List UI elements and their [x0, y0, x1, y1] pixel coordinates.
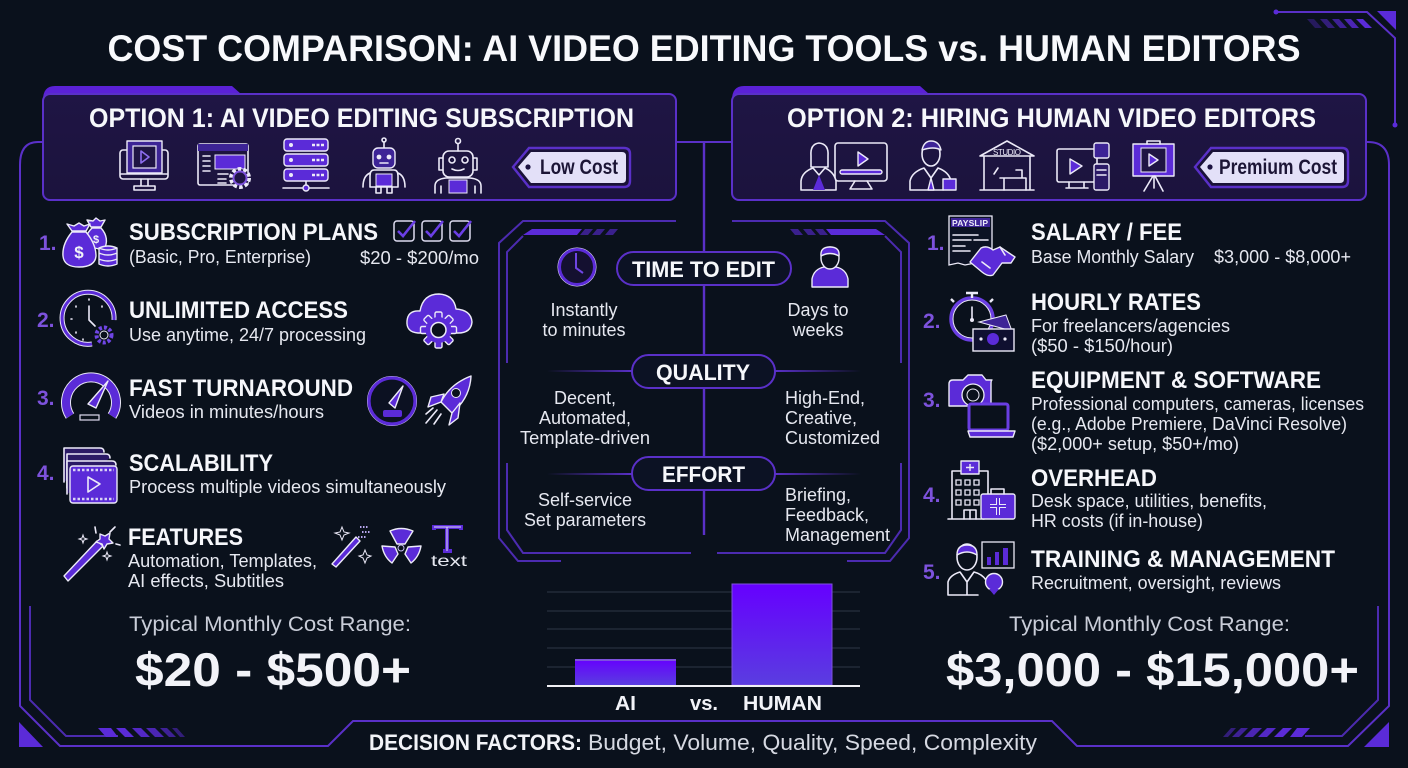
item 2: hourly rates: HOURLY RATES	[1031, 289, 1201, 316]
item 4: scalability: SCALABILITY	[129, 450, 273, 477]
item 1: subscription plans: $20 - $200/mo	[360, 248, 479, 268]
item 4: scalability	[37, 448, 446, 503]
item 5: features: AI effects, Subtitles	[128, 571, 284, 591]
outer frame lines	[19, 142, 1389, 747]
icon: money bags: $	[93, 234, 99, 246]
comparison text: Days to	[787, 300, 849, 320]
bar: human	[732, 584, 832, 685]
pill: quality	[632, 355, 775, 388]
icon: clock with gear	[62, 292, 114, 344]
item 4: overhead: OVERHEAD	[1031, 465, 1157, 492]
icon: payslip and handshake: PAYSLIP	[952, 218, 988, 228]
icon: wand small	[332, 527, 371, 567]
pill: effort: EFFORT	[662, 462, 745, 487]
item 3: equipment: EQUIPMENT & SOFTWARE	[1031, 367, 1321, 394]
comparison text: Set parameters	[524, 510, 646, 530]
comparison text: Template-driven	[520, 428, 650, 448]
item 3: fast turnaround: 3.	[37, 387, 55, 410]
left cost range: $20 - $500+	[135, 643, 411, 696]
item 3: equipment: (e.g., Adobe Premiere, DaVinci Resolve)	[1031, 414, 1347, 434]
item 5: training: Recruitment, oversight, reviews	[1031, 573, 1281, 593]
item 4: overhead: HR costs (if in-house)	[1031, 511, 1203, 531]
icon: server stack	[283, 139, 329, 191]
pill: time to edit: TIME TO EDIT	[632, 257, 775, 282]
panel: human costs list	[923, 216, 1364, 595]
icon: text T	[431, 527, 468, 570]
icon: text T: text	[431, 553, 468, 570]
option 2 heading: OPTION 2: HIRING HUMAN VIDEO EDITORS	[787, 103, 1316, 133]
decision factors	[369, 730, 1037, 755]
item 3: equipment: ($2,000+ setup, $50+/mo)	[1031, 434, 1239, 454]
bar chart	[547, 584, 860, 715]
icon: studio: STUDIO	[993, 148, 1021, 157]
bar: AI	[575, 659, 676, 685]
item 3: equipment: Professional computers, cameras, licenses	[1031, 394, 1364, 414]
title: COST COMPARISON: AI VIDEO EDITING TOOLS vs. HUMAN EDITORS	[108, 28, 1300, 69]
row divider lines	[547, 370, 861, 475]
comparison text: to minutes	[542, 320, 626, 340]
frame brackets	[499, 221, 909, 561]
icon: stopwatch and cash	[951, 293, 1014, 351]
chart labels: AI	[615, 693, 636, 715]
chart labels: vs.	[690, 693, 718, 715]
item 5: training: TRAINING & MANAGEMENT	[1031, 546, 1335, 573]
item 2: unlimited access: 2.	[37, 309, 55, 332]
item 4: overhead	[923, 461, 1267, 531]
item 4: scalability: 4.	[37, 462, 55, 485]
item 1: salary: 1.	[927, 232, 945, 255]
item 5: training: 5.	[923, 561, 941, 584]
item 5: features: Automation, Templates,	[128, 551, 317, 571]
panel: AI costs list	[37, 218, 479, 591]
icon: person	[812, 247, 848, 287]
item 3: fast turnaround	[37, 375, 471, 426]
cost tag: low cost: Low Cost	[540, 156, 618, 179]
icon: editor at monitor	[801, 143, 887, 190]
icon: gauge badge	[368, 376, 416, 426]
item 2: unlimited access	[37, 292, 472, 348]
left cost range: Typical Monthly Cost Range:	[129, 612, 411, 636]
item 2: hourly rates: 2.	[923, 310, 941, 333]
icon: video monitor	[120, 141, 168, 190]
icon: robot one	[363, 138, 405, 193]
icon: businessman	[910, 141, 956, 190]
item 2: hourly rates	[923, 289, 1230, 356]
icon: robot two	[435, 138, 481, 193]
decision factors: DECISION FACTORS:	[369, 730, 582, 755]
corner decoration top right	[1274, 10, 1398, 128]
right cost range: $3,000 - $15,000+	[946, 643, 1359, 696]
comparison text: Feedback,	[785, 505, 869, 525]
pill: quality: QUALITY	[656, 360, 750, 385]
item 1: subscription plans: SUBSCRIPTION PLANS	[129, 219, 378, 246]
panel: option 2 header	[732, 86, 1366, 200]
icon: speedometer	[66, 377, 116, 420]
icon: clock	[558, 248, 596, 286]
item 1: subscription plans: 1.	[39, 232, 57, 255]
comparison text: Decent,	[554, 388, 616, 408]
comparison text: Creative,	[785, 408, 857, 428]
cost tag: premium cost: Premium Cost	[1219, 156, 1337, 179]
item 1: salary: $3,000 - $8,000+	[1214, 247, 1351, 267]
item 2: hourly rates: For freelancers/agencies	[1031, 316, 1230, 336]
icon: settings window	[198, 144, 249, 187]
left cost range	[129, 612, 411, 696]
icon: radiation fan	[382, 528, 421, 563]
panel: option 1 header	[43, 86, 676, 200]
item 2: hourly rates: ($50 - $150/hour)	[1031, 336, 1173, 356]
icon: camera and laptop	[949, 375, 1015, 437]
comparison text: Self-service	[538, 490, 632, 510]
item 5: features	[64, 524, 468, 591]
icon: hospital and kit	[948, 461, 1015, 519]
item 3: fast turnaround: FAST TURNAROUND	[129, 375, 353, 402]
icon: rocket	[426, 376, 471, 425]
panel: comparison centre	[499, 221, 909, 561]
item 1: salary	[927, 216, 1351, 276]
item 4: overhead: Desk space, utilities, benefits,	[1031, 491, 1267, 511]
comparison text: Automated,	[539, 408, 631, 428]
option 1 heading: OPTION 1: AI VIDEO EDITING SUBSCRIPTION	[89, 103, 634, 133]
item 1: subscription plans: (Basic, Pro, Enterprise)	[129, 247, 311, 267]
item 3: equipment: 3.	[923, 389, 941, 412]
item 3: equipment	[923, 367, 1364, 454]
icon: manager with chart	[948, 542, 1014, 595]
chart labels	[615, 693, 822, 715]
item 3: fast turnaround: Videos in minutes/hours	[129, 402, 324, 422]
icon: payslip and handshake	[949, 216, 1015, 276]
comparison text	[520, 300, 890, 545]
right cost range: Typical Monthly Cost Range:	[1009, 612, 1290, 636]
item 4: scalability: Process multiple videos simultaneously	[129, 477, 446, 497]
comparison text: Briefing,	[785, 485, 851, 505]
cost tag: low cost	[513, 148, 630, 187]
decision factors: Budget, Volume, Quality, Speed, Complexity	[588, 730, 1037, 755]
icon: money bags	[63, 218, 117, 267]
comparison text: High-End,	[785, 388, 865, 408]
item 1: salary: SALARY / FEE	[1031, 219, 1182, 246]
icon: studio	[980, 141, 1034, 190]
chart labels: HUMAN	[743, 693, 822, 715]
item 1: salary: Base Monthly Salary	[1031, 247, 1194, 267]
item 5: features: FEATURES	[128, 524, 243, 551]
icon: cloud gear	[407, 294, 472, 348]
icon: desktop computer	[1057, 143, 1109, 190]
comparison text: Management	[785, 525, 890, 545]
item 2: unlimited access: Use anytime, 24/7 processing	[129, 325, 366, 345]
pill: time to edit	[617, 252, 791, 285]
item 5: training	[923, 542, 1335, 595]
icon: money bags: $	[74, 243, 84, 262]
icon: stacked video frames	[64, 448, 117, 503]
right cost range	[946, 612, 1359, 696]
pill: effort	[632, 457, 775, 490]
item 1: subscription plans	[39, 218, 479, 268]
item 2: unlimited access: UNLIMITED ACCESS	[129, 297, 348, 324]
icon: checkboxes	[394, 221, 471, 241]
cost tag: premium cost	[1195, 148, 1348, 187]
icon: film easel	[1133, 141, 1174, 191]
comparison text: weeks	[791, 320, 844, 340]
comparison text: Customized	[785, 428, 880, 448]
icon: magic wand	[64, 527, 120, 581]
comparison text: Instantly	[550, 300, 618, 320]
item 4: overhead: 4.	[923, 484, 941, 507]
